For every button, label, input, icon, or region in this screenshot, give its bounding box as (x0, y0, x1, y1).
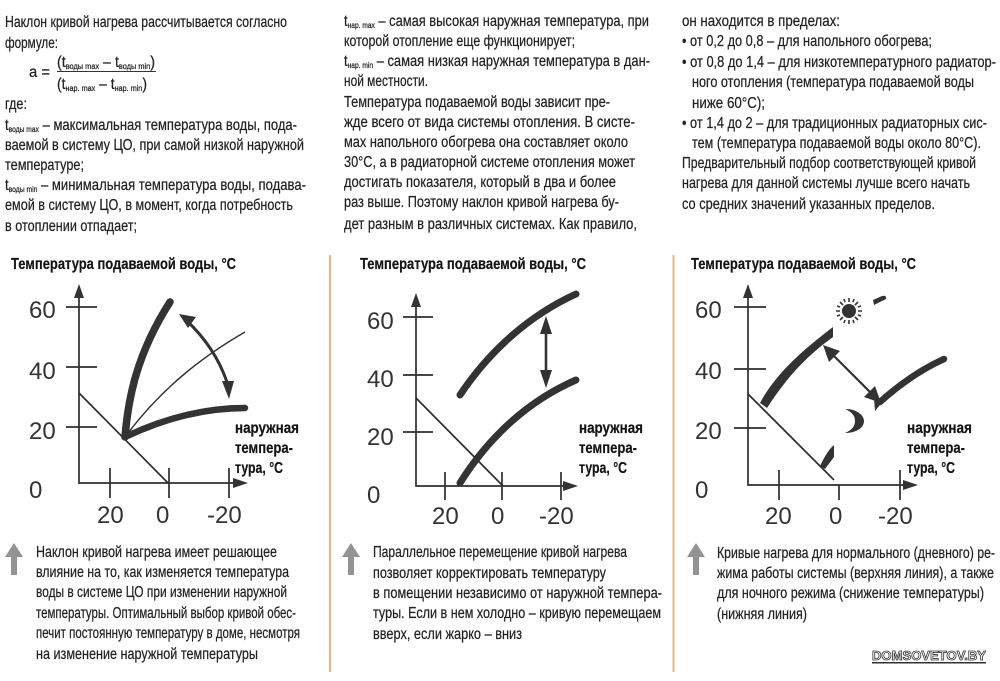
caption 1: влияние на то, как изменяется температура (36, 564, 289, 581)
formula: ) (142, 76, 147, 93)
chart 2 outside temperature label: тура, °С (579, 460, 627, 477)
text column 1: formula explanation: – минимальная температура воды, подава- (37, 177, 306, 194)
text column 1: formula explanation: воды max (9, 125, 39, 134)
chart 2 outside temperature label: темпера- (579, 440, 637, 457)
chart 3 lower curve (874, 359, 944, 411)
formula: нар. min (115, 84, 142, 93)
chart 1 axis numbers: 0 (29, 477, 42, 504)
divider: left (329, 255, 331, 672)
text column 2: water temperature: Температура подаваемой воды зависит пре- (344, 94, 610, 111)
chart 3 diagonal line (748, 394, 834, 480)
chart 1: slope change (11, 256, 299, 529)
text column 2: water temperature: ной местности. (344, 73, 428, 90)
caption 1: температуры. Оптимальный выбор кривой обес- (36, 605, 296, 622)
caption 1 (5, 543, 300, 663)
chart 3 outside temperature label: тура, °С (907, 460, 955, 477)
caption 2: позволяет корректировать температуру (373, 565, 606, 582)
caption 3 (687, 543, 995, 623)
chart 1 axes (66, 284, 248, 498)
text column 3: slope ranges: • от 0,2 до 0,8 – для напольного обогрева; (682, 33, 932, 50)
chart 3 heading: Температура подаваемой воды, °С (691, 256, 916, 273)
text column 2: water temperature: дет разным в различных системах. Как правило, (344, 216, 637, 233)
chart 1 axis numbers: 0 (156, 502, 169, 529)
icon: sun (836, 298, 862, 324)
icon: grey arrow 1 (5, 543, 23, 575)
icon: moon (845, 409, 864, 433)
caption 1: воды в системе ЦО при изменении наружной (36, 584, 287, 601)
chart 2 axis numbers: 60 (367, 308, 394, 335)
chart 1 axis numbers: 20 (29, 418, 56, 445)
chart 1 outside temperature label: тура, °С (235, 460, 283, 477)
text column 1: formula explanation: формуле: (5, 35, 58, 52)
text column 2: water temperature: 30°С, а в радиаторной системе отопления может (344, 154, 635, 171)
chart 1 outside temperature label: темпера- (235, 440, 293, 457)
chart 3 axis numbers: 20 (695, 418, 722, 445)
caption 2: туры. Если в нем холодно – кривую перемещаем (373, 605, 661, 622)
chart 2 diagonal line (416, 398, 502, 485)
chart 3 axes (734, 284, 918, 500)
text column 2: water temperature: достигать показателя, который в два и более (344, 174, 616, 191)
chart 2 axis numbers (367, 308, 574, 530)
text column 2: water temperature (344, 13, 650, 233)
text column 3: slope ranges (682, 13, 996, 213)
formula: a = (29, 64, 50, 81)
formula: – t (95, 76, 115, 93)
chart 2 outside temperature label (579, 420, 643, 477)
chart 3 lower curve fragment (820, 445, 834, 469)
text column 3: slope ranges: ниже 60°С); (692, 95, 765, 112)
caption 1: Наклон кривой нагрева имеет решающее (36, 544, 277, 561)
text column 2: water temperature: нар. max (348, 21, 375, 30)
chart 1 outside temperature label: наружная (235, 420, 299, 437)
text column 1: formula explanation: t (5, 177, 9, 194)
chart 1 axis numbers: -20 (207, 502, 242, 529)
caption 1: печит постоянную температуру в доме, несмотря (36, 625, 300, 642)
text column 2: water temperature: – самая низкая наружная температура в дан- (373, 53, 650, 70)
caption 2: в помещении независимо от наружной темпера- (373, 585, 662, 602)
text column 1: formula explanation: ваемой в систему ЦО, при самой низкой наружной (5, 137, 304, 154)
caption 2: Параллельное перемещение кривой нагрева (373, 544, 627, 561)
formula: ) (150, 54, 155, 71)
chart 3 axis numbers: 60 (695, 297, 722, 324)
chart 3 upper curve fragment (873, 296, 886, 305)
chart 2 axis numbers: 0 (491, 503, 504, 530)
formula: (t (57, 54, 66, 71)
chart 3 axis numbers: 0 (829, 503, 842, 530)
chart 1 axis numbers: 60 (29, 297, 56, 324)
text column 2: water temperature: нар. min (348, 61, 373, 70)
chart 1 heading: Температура подаваемой воды, °С (11, 256, 236, 273)
formula: нар. max (66, 84, 95, 93)
chart 2 axes (403, 293, 578, 500)
text column 2: water temperature: t (344, 13, 348, 30)
chart 2 axis numbers: 20 (367, 424, 394, 451)
chart 3 double arrow (823, 345, 881, 403)
text column 1: formula explanation: температуре; (5, 157, 84, 174)
caption 2 (342, 543, 662, 643)
icon: grey arrow 3 (687, 543, 705, 575)
chart 1 double arrow (179, 314, 234, 399)
formula: воды min (119, 62, 150, 71)
chart 1 axis numbers (29, 297, 242, 529)
chart 2 axis numbers: 20 (432, 503, 459, 530)
text column 2: water temperature: жде всего от вида системы отопления. В систе- (344, 114, 635, 131)
text column 1: formula explanation: где: (5, 96, 27, 113)
chart 3: day and night curves (691, 256, 972, 530)
text column 2: water temperature: которой отопление еще функционирует; (344, 33, 575, 50)
chart 3 axis numbers: 20 (765, 503, 792, 530)
watermark: DOMSOVETOV.BY (872, 648, 986, 663)
chart 3 axis numbers (695, 297, 913, 530)
formula: воды max (66, 62, 99, 71)
chart 2 axis numbers: 40 (367, 366, 394, 393)
chart 3 upper curve (760, 327, 833, 408)
text column 1: formula explanation: воды min (9, 185, 37, 194)
chart 3 outside temperature label: наружная (907, 420, 972, 437)
chart 3 outside temperature label (907, 420, 972, 477)
text column 2: water temperature: раз выше. Поэтому наклон кривой нагрева бу- (344, 194, 619, 211)
chart 2 heading: Температура подаваемой воды, °С (360, 256, 586, 273)
chart 3 axis numbers: 0 (695, 477, 708, 504)
chart 2 lower curve (460, 380, 576, 483)
chart 1 outside temperature label (235, 420, 299, 477)
text column 1: formula explanation: в отоплении отпадает; (5, 218, 137, 235)
chart 1 axis numbers: 40 (29, 358, 56, 385)
text column 1: formula explanation: Наклон кривой нагрева рассчитывается согласно (5, 14, 287, 31)
chart 2: parallel shift (360, 256, 643, 530)
formula (29, 54, 156, 93)
text column 3: slope ranges: он находится в пределах: (682, 13, 840, 30)
caption 3: (нижняя линия) (717, 606, 807, 623)
chart 2 double arrow (540, 316, 552, 388)
chart 1 steep curve (125, 302, 170, 437)
chart 2 axis numbers: 0 (367, 482, 380, 509)
caption 2: вверх, если жарко – вниз (373, 626, 522, 643)
text column 1: formula explanation: t (5, 117, 9, 134)
text column 3: slope ranges: со средних значений указанных пределов. (682, 196, 935, 213)
chart 3 axis numbers: -20 (878, 503, 913, 530)
chart 1 diagonal line (79, 393, 168, 483)
text column 2: water temperature: мах напольного обогрева она составляет около (344, 134, 628, 151)
text column 1: formula explanation: – максимальная температура воды, пода- (39, 117, 297, 134)
text column 2: water temperature: t (344, 53, 348, 70)
icon: grey arrow 2 (342, 543, 360, 575)
chart 3 axis numbers: 40 (695, 358, 722, 385)
divider: right (672, 255, 674, 672)
text column 1: formula explanation (5, 14, 306, 235)
chart 1 thin curve (125, 332, 245, 437)
chart 2 upper curve (460, 294, 576, 395)
chart 3 outside temperature label: темпера- (907, 440, 965, 457)
caption 1: на изменение наружной температуры (36, 646, 258, 663)
text column 2: water temperature: – самая высокая наружная температура, при (375, 13, 649, 30)
chart 2 outside temperature label: наружная (579, 420, 643, 437)
formula: (t (57, 76, 66, 93)
chart 2 axis numbers: -20 (539, 503, 574, 530)
formula: – t (99, 54, 120, 71)
chart 1 axis numbers: 20 (97, 502, 124, 529)
chart 1 flat curve (125, 408, 245, 437)
text column 1: formula explanation: емой в систему ЦО, в момент, когда потребность (5, 197, 293, 214)
